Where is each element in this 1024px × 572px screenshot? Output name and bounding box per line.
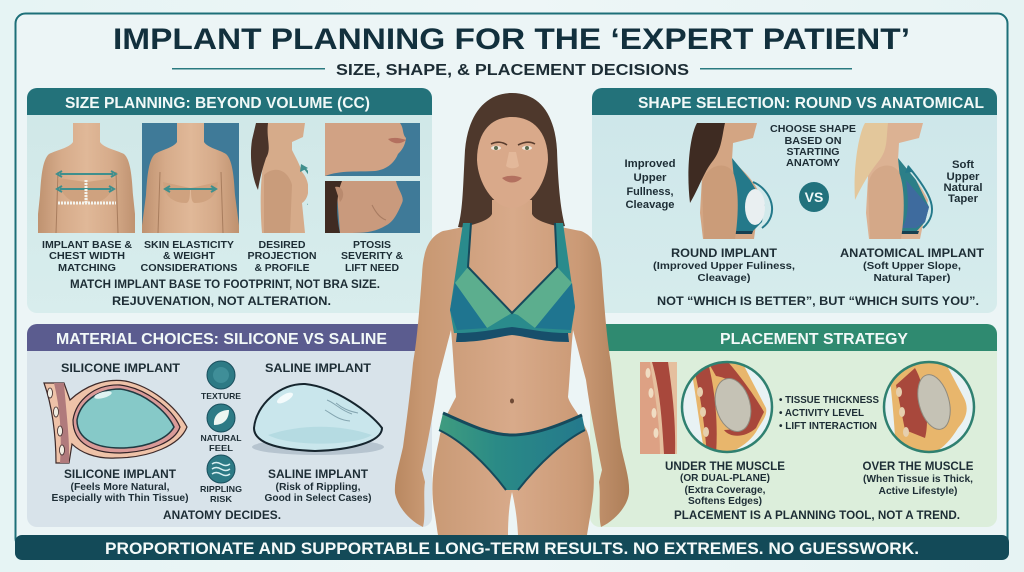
title: IMPLANT PLANNING FOR THE ‘EXPERT PATIENT’: [113, 23, 910, 56]
rippling risk label: [200, 484, 242, 504]
placement strategy header: [590, 324, 997, 351]
anatomical benefit note: Upper: [946, 171, 980, 183]
placement factors list: • LIFT INTERACTION: [779, 420, 877, 432]
photo: round implant profile: [688, 123, 772, 239]
under the muscle caption: UNDER THE MUSCLE: [665, 459, 785, 473]
natural feel label: [200, 433, 242, 453]
shape selection header: [592, 88, 997, 115]
vs badge: [799, 182, 829, 212]
placement factors list: • TISSUE THICKNESS: [779, 394, 879, 406]
icon: rippling waves: [207, 455, 235, 483]
photo: chest width measurement: [36, 123, 137, 233]
round benefit note: Improved: [624, 158, 676, 170]
photo: aged profile: [325, 181, 420, 233]
size planning captions: IMPLANT BASE &: [42, 239, 132, 251]
photo: anatomical implant profile: [855, 123, 932, 239]
material choices header: MATERIAL CHOICES: SILICONE VS SALINE: [56, 331, 387, 348]
anatomical benefit note: Soft: [952, 159, 974, 171]
size planning captions: CHEST WIDTH: [49, 250, 125, 262]
size planning captions: LIFT NEED: [345, 262, 399, 274]
texture label: TEXTURE: [201, 391, 241, 401]
size planning captions: PTOSIS: [353, 239, 391, 251]
size planning header: [27, 88, 432, 115]
over the muscle caption: Active Lifestyle): [878, 486, 958, 497]
diagram: saline implant: [252, 384, 384, 455]
saline caption: Good in Select Cases): [264, 493, 372, 504]
size planning captions: MATCHING: [58, 262, 116, 274]
over the muscle caption: [862, 459, 974, 497]
under the muscle caption: Softens Edges): [688, 496, 762, 507]
choose shape note: ANATOMY: [786, 157, 840, 169]
natural feel label: NATURAL: [200, 433, 242, 443]
size planning captions: SEVERITY &: [341, 250, 403, 262]
round benefit note: [624, 158, 676, 211]
silicone caption: SILICONE IMPLANT: [64, 467, 177, 481]
round benefit note: Upper: [634, 172, 667, 184]
under the muscle caption: (Extra Coverage,: [684, 485, 766, 496]
body: [395, 200, 629, 535]
size planning captions: PROJECTION: [248, 250, 316, 262]
silicone caption: (Feels More Natural,: [70, 482, 170, 493]
photo: side profile: [251, 123, 313, 233]
placement factors list: [779, 394, 879, 432]
saline heading: SALINE IMPLANT: [265, 361, 372, 375]
anatomical benefit note: Natural: [944, 182, 982, 194]
choose shape note: STARTING: [786, 146, 840, 158]
rippling risk label: RISK: [210, 494, 233, 504]
choose shape note: CHOOSE SHAPE: [770, 123, 856, 135]
choose shape note: [770, 123, 856, 169]
size planning takeaway: REJUVENATION, NOT ALTERATION.: [112, 294, 331, 308]
panel: material choices: [27, 324, 432, 527]
vs badge: VS: [805, 189, 823, 205]
size planning captions: DESIRED: [258, 239, 306, 251]
panel: size planning: [27, 88, 432, 313]
choose shape note: BASED ON: [784, 135, 842, 147]
subtitle: SIZE, SHAPE, & PLACEMENT DECISIONS: [336, 62, 689, 79]
anatomical implant caption: Natural Taper): [874, 272, 950, 284]
over the muscle caption: (When Tissue is Thick,: [863, 474, 973, 485]
size planning captions: & PROFILE: [254, 262, 310, 274]
saline caption: (Risk of Rippling,: [276, 482, 361, 493]
saline caption: [264, 467, 372, 504]
silicone heading: SILICONE IMPLANT: [61, 361, 181, 375]
rippling risk label: RIPPLING: [200, 484, 242, 494]
diagram: over the muscle: [884, 362, 974, 455]
face: [477, 117, 548, 208]
size planning captions: SKIN ELASTICITY: [144, 239, 234, 251]
bottom banner: PROPORTIONATE AND SUPPORTABLE LONG-TERM RESULTS. NO EXTREMES. NO GUESSWORK.: [105, 540, 919, 558]
natural feel label: FEEL: [209, 443, 233, 453]
central figure: [395, 93, 629, 535]
shape takeaway: NOT “WHICH IS BETTER”, BUT “WHICH SUITS YOU”.: [657, 294, 979, 308]
saline caption: SALINE IMPLANT: [268, 467, 369, 481]
round implant caption: [653, 246, 795, 284]
icon: natural feel leaf: [207, 404, 235, 432]
panel: shape selection: [592, 88, 997, 313]
photo: skin elasticity: [141, 123, 240, 233]
under the muscle caption: [665, 459, 785, 507]
hair: [458, 93, 565, 229]
size planning captions: [42, 239, 403, 274]
anatomical benefit note: Taper: [948, 193, 979, 205]
anatomical implant caption: [840, 246, 985, 284]
size planning takeaway: [70, 277, 380, 308]
round benefit note: Fullness,: [626, 186, 674, 198]
diagram: silicone implant in tissue: [44, 380, 187, 463]
anatomical implant caption: ANATOMICAL IMPLANT: [840, 246, 985, 260]
placement strategy header: PLACEMENT STRATEGY: [720, 331, 908, 348]
material takeaway: ANATOMY DECIDES.: [163, 508, 281, 522]
size planning captions: & WEIGHT: [163, 250, 216, 262]
size planning takeaway: MATCH IMPLANT BASE TO FOOTPRINT, NOT BRA SIZE.: [70, 277, 380, 291]
icon: texture: [207, 361, 235, 389]
silicone caption: [52, 467, 188, 504]
silicone caption: Especially with Thin Tissue): [52, 493, 188, 504]
diagram: chest wall strip: [640, 362, 677, 454]
bikini top: [450, 223, 575, 342]
photo: jawline: [325, 123, 420, 176]
size planning header: SIZE PLANNING: BEYOND VOLUME (CC): [65, 95, 370, 112]
round benefit note: Cleavage: [626, 199, 674, 211]
size planning captions: CONSIDERATIONS: [140, 262, 238, 274]
placement factors list: • ACTIVITY LEVEL: [779, 407, 865, 419]
placement takeaway: PLACEMENT IS A PLANNING TOOL, NOT A TREND.: [674, 508, 960, 522]
diagram: under the muscle: [682, 362, 772, 455]
panel: placement strategy: [590, 324, 997, 527]
bikini bottom: [439, 413, 585, 490]
under the muscle caption: (OR DUAL-PLANE): [680, 473, 770, 484]
material choices header: [27, 324, 432, 351]
round implant caption: ROUND IMPLANT: [671, 246, 778, 260]
over the muscle caption: OVER THE MUSCLE: [862, 459, 974, 473]
round implant caption: Cleavage): [698, 272, 750, 284]
round implant caption: (Improved Upper Fuliness,: [653, 260, 795, 272]
shape selection header: SHAPE SELECTION: ROUND VS ANATOMICAL: [638, 95, 984, 112]
anatomical implant caption: (Soft Upper Slope,: [863, 260, 961, 272]
bottom banner: [15, 535, 1009, 560]
anatomical benefit note: [944, 159, 982, 205]
